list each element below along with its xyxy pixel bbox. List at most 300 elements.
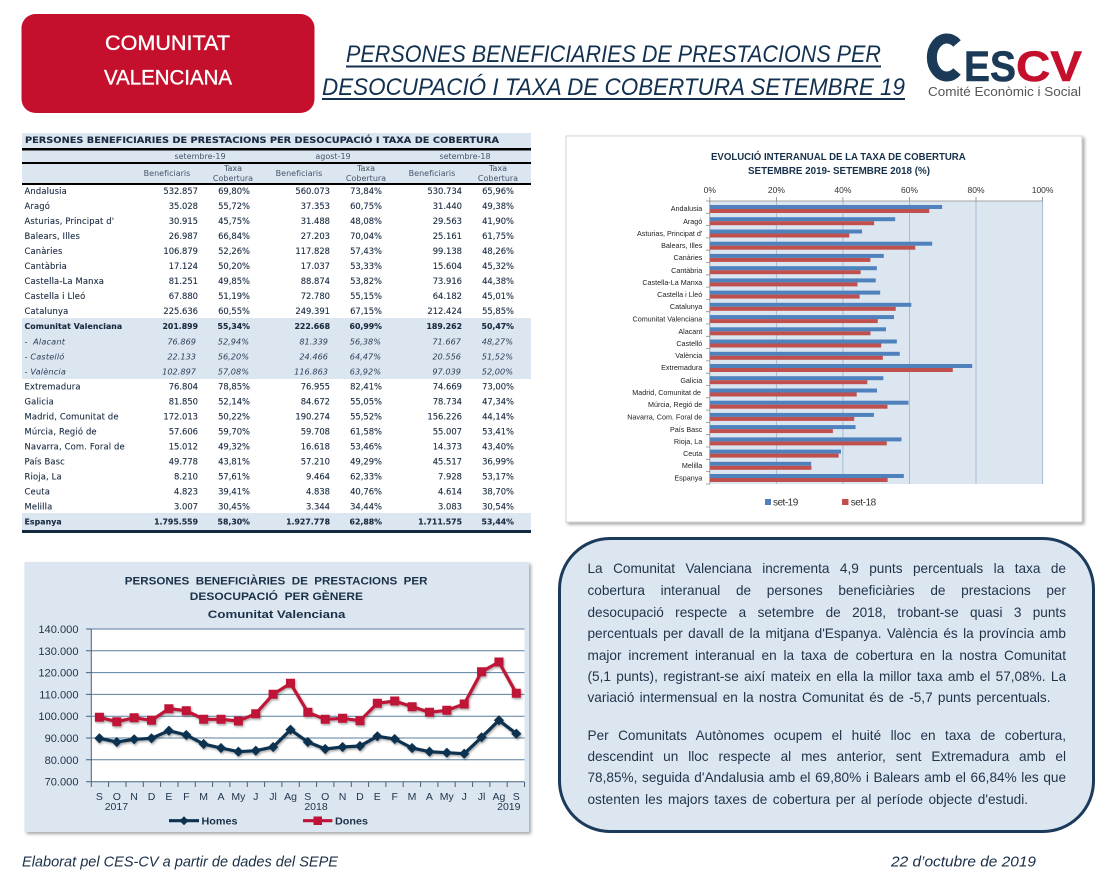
row: Rioja: 7.928: [438, 472, 462, 482]
table title: PERSONES BENEFICIARIES DE PRESTACIONS PER DESOCUPACIÓ I TAXA DE COBERTURA: [25, 134, 499, 146]
bar chart category labels: Canàries: [674, 253, 703, 262]
row: València: 97.039: [432, 366, 461, 376]
row: Extremadura: Extremadura: [24, 382, 81, 392]
row: Madrid: Madrid, Comunitat de: [24, 412, 119, 422]
row: Castella-La Manxa: Castella-La Manxa: [24, 276, 104, 286]
row: Balears: 61,75%: [482, 231, 514, 241]
row: Espanya: 53,44%: [482, 518, 514, 526]
row: Cantàbria: [24, 261, 514, 271]
x axis labels: N: [130, 791, 138, 803]
row: Catalunya: 249.391: [295, 306, 330, 316]
row: Balears: 70,04%: [350, 231, 382, 241]
row: Espanya: 1.795.559: [154, 518, 198, 526]
bars: set-18: [710, 209, 953, 482]
x axis labels: Ag: [492, 791, 505, 803]
line chart legend: Homes: [202, 816, 238, 828]
row: Castelló: 24.466: [299, 352, 328, 362]
x axis labels: E: [374, 791, 381, 803]
row: Espanya: 58,30%: [218, 518, 250, 526]
row: Castelló: 64,47%: [350, 352, 381, 362]
x axis labels: S: [513, 791, 520, 803]
row: Castella i Lleó: Castella i Lleó: [24, 291, 85, 301]
x axis labels: [96, 791, 521, 813]
row: Canàries: 99.138: [433, 246, 462, 256]
row: Comunitat Valenciana: 201.899: [162, 322, 198, 331]
row: Espanya: 62,88%: [350, 518, 382, 526]
bar chart title: EVOLUCIÓ INTERANUAL DE LA TAXA DE COBERTURA: [711, 150, 966, 163]
table column headers: Beneficiaris: [276, 169, 322, 178]
row: Madrid: 55,52%: [350, 412, 382, 422]
row: Asturias: 41,90%: [482, 216, 514, 226]
x axis labels: D: [148, 791, 156, 803]
row: València: - València: [24, 366, 66, 376]
row: Alacant: 81.339: [299, 336, 328, 346]
y axis labels: 140.000: [38, 624, 78, 636]
x axis labels: D: [356, 791, 364, 803]
row: Canàries: 48,26%: [482, 246, 514, 256]
row: País Basc: [24, 456, 514, 466]
bar chart title: SETEMBRE 2019- SETEMBRE 2018 (%): [748, 166, 930, 177]
table column headers: agost-19: [315, 152, 351, 161]
row: Alacant: - Alacant: [24, 336, 66, 346]
x axis labels: O: [113, 791, 121, 803]
x axis labels: O: [321, 791, 329, 803]
table column headers: Beneficiaris: [144, 169, 190, 178]
row: Castella-La Manxa: 81.251: [169, 276, 198, 286]
table column headers: Cobertura: [478, 174, 518, 183]
commentary text box: variació intermensual en la nostra Comunitat és de -5,7 punts percentuals.: [588, 690, 1050, 705]
row: Rioja: 62,33%: [350, 472, 382, 482]
row: Cantàbria: 17.124: [169, 261, 198, 271]
line chart legend: Dones: [335, 816, 368, 828]
line chart legend: [169, 816, 368, 828]
row: Extremadura: 73,00%: [482, 382, 514, 392]
row: Ceuta: [24, 486, 514, 496]
row: Aragó: 37.353: [301, 201, 330, 211]
row: Navarra: 49,32%: [218, 442, 250, 452]
commentary text box: major increment interanual en la taxa de cobertura en la nostra Comunitat: [588, 648, 1066, 663]
row: Castelló: - Castelló: [24, 352, 64, 362]
heading badge: Comunitat Valenciana: VALENCIANA: [104, 66, 232, 90]
line chart title: PERSONES BENEFICIÀRIES DE PRESTACIONS PER: [125, 574, 428, 588]
row: Melilla: 30,45%: [218, 502, 250, 512]
bar chart title: [711, 150, 966, 177]
row: Castella i Lleó: 51,19%: [218, 291, 250, 301]
commentary text box: desocupació respecte a setembre de 2018, trobant-se quasi 3 punts: [588, 605, 1066, 620]
row: Catalunya: 212.424: [427, 306, 462, 316]
data table: [22, 133, 531, 533]
row: Espanya: Espanya: [24, 518, 62, 526]
commentary text box: (5,1 punts), registrant-se així mateix en ella la millor taxa amb el 57,08%. La: [588, 669, 1066, 684]
row: Alacant: 52,94%: [218, 336, 249, 346]
row: Extremadura: 82,41%: [350, 382, 382, 392]
row: Canàries: 106.879: [163, 246, 198, 256]
y axis labels: 100.000: [38, 711, 78, 723]
table column headers: Taxa: [488, 164, 507, 173]
bar chart category labels: Castella-La Manxa: [642, 278, 702, 287]
row: Castelló: [24, 352, 513, 362]
main title: [322, 41, 905, 101]
row: Andalusia: [24, 186, 514, 196]
row: Rioja: 53,17%: [482, 472, 514, 482]
row: València: 63,92%: [350, 366, 381, 376]
bar chart category labels: País Basc: [670, 425, 703, 434]
row: Madrid: 50,22%: [218, 412, 250, 422]
x axis labels: J: [462, 791, 467, 803]
logo: CES-CV: Comité Econòmic i Social: [928, 84, 1081, 99]
row: Catalunya: 60,55%: [218, 306, 250, 316]
row: Canàries: 52,26%: [218, 246, 250, 256]
bar chart axis labels: [704, 185, 1054, 195]
row: Espanya: [24, 518, 514, 526]
y axis labels: 90.000: [45, 733, 78, 745]
row: Galicia: 55,05%: [350, 396, 382, 406]
x axis labels: My: [440, 791, 455, 803]
row: València: 116.863: [294, 366, 328, 376]
line chart title: [125, 574, 428, 621]
row: Catalunya: [24, 306, 514, 316]
row: Asturias: 45,75%: [218, 216, 250, 226]
row: Cantàbria: 17.037: [301, 261, 330, 271]
y axis labels: 70.000: [45, 777, 78, 789]
x axis labels: S: [96, 791, 103, 803]
y axis labels: 120.000: [38, 668, 78, 680]
bar chart category labels: Espanya: [674, 474, 702, 482]
row: Canàries: 57,43%: [350, 246, 382, 256]
row: Madrid: 172.013: [163, 412, 198, 422]
row: Madrid: 156.226: [427, 412, 462, 422]
table column headers: Cobertura: [346, 174, 386, 183]
bar chart axis labels: 40%: [834, 185, 852, 195]
row: Comunitat Valenciana: Comunitat Valenciana: [24, 322, 122, 331]
row: Castella-La Manxa: 88.874: [301, 276, 330, 286]
row: Asturias: 48,08%: [350, 216, 382, 226]
row: Aragó: 35.028: [169, 201, 198, 211]
bar chart category labels: Comunitat Valenciana: [633, 314, 702, 324]
row: Balears: 25.161: [433, 231, 462, 241]
panel: line chart by gender: [24, 562, 529, 832]
x axis labels: F: [391, 791, 398, 803]
row: Castella-La Manxa: 53,82%: [350, 276, 382, 286]
row: Castella-La Manxa: [24, 276, 514, 286]
logo: CES-CV: ES: [964, 43, 1016, 91]
row: Comunitat Valenciana: 55,34%: [218, 322, 250, 331]
bar chart category labels: Balears, Illes: [661, 241, 703, 250]
row: Andalusia: 532.857: [163, 186, 198, 196]
table column headers: Cobertura: [213, 174, 253, 183]
row: Canàries: [24, 246, 514, 256]
row: Castella i Lleó: 72.780: [301, 291, 330, 301]
x axis labels: 2019: [497, 801, 521, 813]
row: Ceuta: 4.838: [306, 486, 330, 496]
main title: PERSONES BENEFICIARIES DE PRESTACIONS PER: [346, 41, 881, 68]
row: Catalunya: 55,85%: [482, 306, 514, 316]
row: Asturias: 29.563: [433, 216, 462, 226]
bars: set-19: [710, 205, 972, 478]
row: Espanya: 1.927.778: [286, 518, 330, 526]
heading badge: Comunitat Valenciana: COMUNITAT: [105, 32, 230, 55]
row: Extremadura: 76.955: [301, 382, 330, 392]
row: Múrcia: 59.708: [301, 426, 330, 436]
row: Asturias: 30.915: [169, 216, 198, 226]
row: Extremadura: 74.669: [433, 382, 462, 392]
table column headers: [144, 152, 518, 183]
line series: Dones: [96, 658, 520, 726]
row: Melilla: 34,44%: [350, 502, 382, 512]
row: Rioja: 9.464: [306, 472, 330, 482]
row: Castelló: 22.133: [167, 352, 196, 362]
row: Asturias: Asturias, Principat d': [24, 216, 114, 226]
row: País Basc: 49,29%: [350, 456, 382, 466]
commentary text box: Per Comunitats Autònomes ocupem el huité lloc en taxa de cobertura,: [588, 728, 1066, 743]
x axis labels: Jl: [478, 791, 485, 803]
row: Castella i Lleó: [24, 291, 514, 301]
x axis labels: M: [199, 791, 208, 803]
bar chart category labels: [627, 204, 703, 482]
row: Balears: 66,84%: [218, 231, 250, 241]
bar chart axis labels: 100%: [1032, 185, 1054, 195]
row: Madrid: [24, 412, 514, 422]
row: Navarra: 53,46%: [350, 442, 382, 452]
row: Andalusia: Andalusia: [24, 186, 67, 196]
bar chart category labels: Alacant: [678, 327, 702, 336]
logo: CES-CV: [928, 38, 1082, 99]
bar chart category labels: Castella i Lleó: [657, 290, 702, 299]
x axis labels: M: [408, 791, 416, 803]
x axis labels: S: [304, 791, 311, 803]
row: Extremadura: 76.804: [169, 382, 198, 392]
row: Castella-La Manxa: 73.916: [433, 276, 462, 286]
row: Galicia: [24, 396, 514, 406]
y axis labels: 110.000: [39, 689, 78, 701]
row: Galicia: Galicia: [24, 396, 54, 406]
row: Melilla: 3.007: [174, 502, 198, 512]
row: País Basc: 49.778: [169, 456, 198, 466]
bar chart category labels: Catalunya: [670, 302, 702, 311]
row: Navarra: 43,40%: [482, 442, 514, 452]
row: Ceuta: 40,76%: [350, 486, 382, 496]
row: Navarra: 14.373: [433, 442, 462, 452]
x axis labels: N: [339, 791, 346, 803]
bar chart legend: set-18: [851, 498, 877, 508]
row: País Basc: País Basc: [24, 456, 65, 466]
footer: date: 22 d’octubre de 2019: [890, 854, 1037, 870]
footer: source: Elaborat pel CES-CV a partir de dades del SEPE: [22, 854, 339, 870]
commentary text box: percentuals per davall de la mitjana d'Espanya. València és la província amb: [588, 626, 1066, 641]
row: Alacant: 76.869: [167, 336, 196, 346]
row: Galicia: 78.734: [433, 396, 462, 406]
heading badge: Comunitat Valenciana: [22, 14, 314, 113]
row: Castelló: 56,20%: [218, 352, 249, 362]
row: Navarra: 16.618: [301, 442, 330, 452]
row: Aragó: 49,38%: [482, 201, 514, 211]
row: Castella-La Manxa: 49,85%: [218, 276, 250, 286]
x axis labels: A: [217, 791, 225, 803]
row: Múrcia: 59,70%: [218, 426, 250, 436]
row: Extremadura: 78,85%: [218, 382, 250, 392]
row: Galicia: 52,14%: [218, 396, 250, 406]
commentary text box: cobertura interanual de persones beneficiàries de prestacions per: [588, 583, 1066, 598]
row: País Basc: 45.517: [433, 456, 462, 466]
logo: CES-CV: CV: [1016, 43, 1082, 91]
x axis labels: J: [253, 791, 258, 803]
bar chart legend: set-19: [773, 498, 799, 508]
row: Rioja: [24, 472, 514, 482]
row: Balears: [24, 231, 514, 241]
row: Cantàbria: 15.604: [433, 261, 462, 271]
commentary text box: ostenten les majors taxes de cobertura per al període objecte d'estudi.: [588, 792, 1028, 807]
row: Catalunya: Catalunya: [24, 306, 68, 316]
row: Andalusia: 560.073: [295, 186, 330, 196]
row: Melilla: Melilla: [24, 502, 52, 512]
row: Canàries: Canàries: [24, 246, 62, 256]
row: Navarra: 15.012: [169, 442, 198, 452]
bar chart category labels: Galicia: [680, 376, 702, 385]
row: Ceuta: 4.614: [438, 486, 462, 496]
bar chart category labels: Extremadura: [661, 363, 702, 372]
row: València: 102.897: [162, 366, 197, 376]
commentary text box: [558, 537, 1095, 833]
row: País Basc: 36,99%: [482, 456, 514, 466]
row: Navarra: Navarra, Com. Foral de: [24, 442, 125, 452]
row: Cantàbria: 50,20%: [218, 261, 250, 271]
row: Cantàbria: 53,33%: [350, 261, 382, 271]
x axis labels: A: [426, 791, 433, 803]
bar chart axis labels: 80%: [967, 185, 985, 195]
row: Melilla: 30,54%: [482, 502, 514, 512]
row: Ceuta: 4.823: [174, 486, 198, 496]
row: Múrcia: Múrcia, Regió de: [24, 426, 97, 436]
row: Alacant: [24, 336, 513, 346]
bar chart category labels: Castelló: [676, 339, 702, 348]
row: Asturias: 31.488: [301, 216, 330, 226]
row: Castelló: 51,52%: [482, 352, 513, 362]
row: Múrcia: 55.007: [433, 426, 462, 436]
bar chart category labels: Múrcia, Regió de: [648, 400, 702, 409]
x axis labels: E: [165, 791, 172, 803]
row: Aragó: [24, 201, 514, 211]
row: Ceuta: Ceuta: [24, 486, 50, 496]
table column headers: Taxa: [223, 164, 242, 173]
row: Múrcia: 57.606: [169, 426, 198, 436]
y axis labels: 130.000: [38, 646, 78, 658]
bar chart category labels: Ceuta: [683, 449, 702, 458]
row: Balears: 26.987: [169, 231, 198, 241]
row: Castella i Lleó: 55,15%: [350, 291, 382, 301]
row: Rioja: 8.210: [174, 472, 198, 482]
row: Balears: Balears, Illes: [24, 231, 80, 241]
line chart title: Comunitat Valenciana: [208, 609, 346, 621]
x axis labels: Ag: [284, 791, 297, 803]
x axis labels: 2017: [105, 801, 128, 813]
bar chart category labels: Asturias, Principat d': [637, 229, 703, 238]
row: Alacant: 48,27%: [482, 336, 513, 346]
row: Alacant: 71.667: [432, 336, 462, 346]
row: Castella i Lleó: 45,01%: [482, 291, 514, 301]
row: Castella i Lleó: 64.182: [433, 291, 462, 301]
row: Ceuta: 38,70%: [482, 486, 514, 496]
panel: bar chart of coverage rate: [566, 136, 1082, 522]
y axis labels: 80.000: [45, 755, 78, 767]
row: Comunitat Valenciana: 60,99%: [350, 322, 382, 331]
row: Andalusia: 73,84%: [350, 186, 382, 196]
row: Andalusia: 530.734: [427, 186, 462, 196]
row: Cantàbria: Cantàbria: [24, 261, 67, 271]
bar chart category labels: Madrid, Comunitat de: [632, 388, 701, 397]
bar chart category labels: Melilla: [682, 461, 702, 470]
row: Aragó: 31.440: [433, 201, 462, 211]
row: Múrcia: [24, 426, 514, 436]
bar chart category labels: València: [675, 351, 702, 360]
row: Balears: 27.203: [301, 231, 330, 241]
row: Madrid: 44,14%: [482, 412, 514, 422]
bar chart axis labels: 20%: [768, 185, 785, 195]
row: Castella-La Manxa: 44,38%: [482, 276, 514, 286]
row: Múrcia: 61,58%: [350, 426, 382, 436]
row: Asturias: [24, 216, 514, 226]
table column headers: setembre-18: [439, 152, 491, 161]
bar chart category labels: Navarra, Com. Foral de: [627, 412, 702, 422]
row: Rioja: Rioja, La: [24, 472, 62, 482]
bar chart category labels: Cantàbria: [671, 266, 702, 275]
bar chart category labels: Andalusia: [671, 204, 702, 213]
row: València: 57,08%: [218, 366, 249, 376]
row: Galicia: 81.850: [169, 396, 198, 406]
row: Canàries: 117.828: [295, 246, 330, 256]
row: Alacant: 56,38%: [350, 336, 381, 346]
line series: Homes: [95, 716, 521, 758]
row: Aragó: Aragó: [24, 201, 50, 211]
row: Melilla: 3.083: [438, 502, 462, 512]
row: Comunitat Valenciana: 222.668: [294, 322, 330, 331]
bar chart category labels: Rioja, La: [674, 437, 702, 446]
table column headers: Taxa: [356, 164, 375, 173]
row: Aragó: 55,72%: [218, 201, 250, 211]
commentary text box: 78,85%, seguida d'Andalusia amb el 69,80% i Balears amb el 66,84% les que: [588, 770, 1066, 785]
table column headers: Beneficiaris: [409, 169, 455, 178]
bar chart axis labels: 0%: [704, 185, 716, 195]
x axis labels: 2018: [304, 801, 328, 813]
bar chart legend: [765, 498, 877, 508]
row: Comunitat Valenciana: 189.262: [426, 322, 462, 331]
row: Navarra: [24, 442, 514, 452]
row: Rioja: 57,61%: [218, 472, 250, 482]
row: València: [24, 366, 513, 376]
bar chart axis labels: 60%: [901, 185, 918, 195]
row: Galicia: 47,34%: [482, 396, 514, 406]
row: Extremadura: [24, 382, 514, 392]
table column headers: setembre-19: [174, 152, 226, 161]
row: Catalunya: 225.636: [163, 306, 198, 316]
row: Galicia: 84.672: [301, 396, 330, 406]
x axis labels: My: [231, 791, 246, 803]
row: Melilla: [24, 502, 514, 512]
commentary text box: descendint un lloc respecte al mes anterior, sent Extremadura amb el: [588, 749, 1066, 764]
line chart title: DESOCUPACIÓ PER GÈNERE: [190, 590, 363, 603]
row: Melilla: 3.344: [306, 502, 330, 512]
bar chart category labels: Aragó: [683, 217, 702, 226]
row: Comunitat Valenciana: [24, 322, 514, 331]
row: Comunitat Valenciana: 50,47%: [482, 322, 514, 331]
row: Castelló: 20.556: [432, 352, 461, 362]
x axis labels: F: [183, 791, 190, 803]
row: Aragó: 60,75%: [350, 201, 382, 211]
row: Castella i Lleó: 67.880: [169, 291, 198, 301]
row: Cantàbria: 45,32%: [482, 261, 514, 271]
main title: DESOCUPACIÓ I TAXA DE COBERTURA SETEMBRE 19: [322, 74, 905, 101]
row: País Basc: 57.210: [301, 456, 330, 466]
y axis labels: [38, 624, 78, 789]
